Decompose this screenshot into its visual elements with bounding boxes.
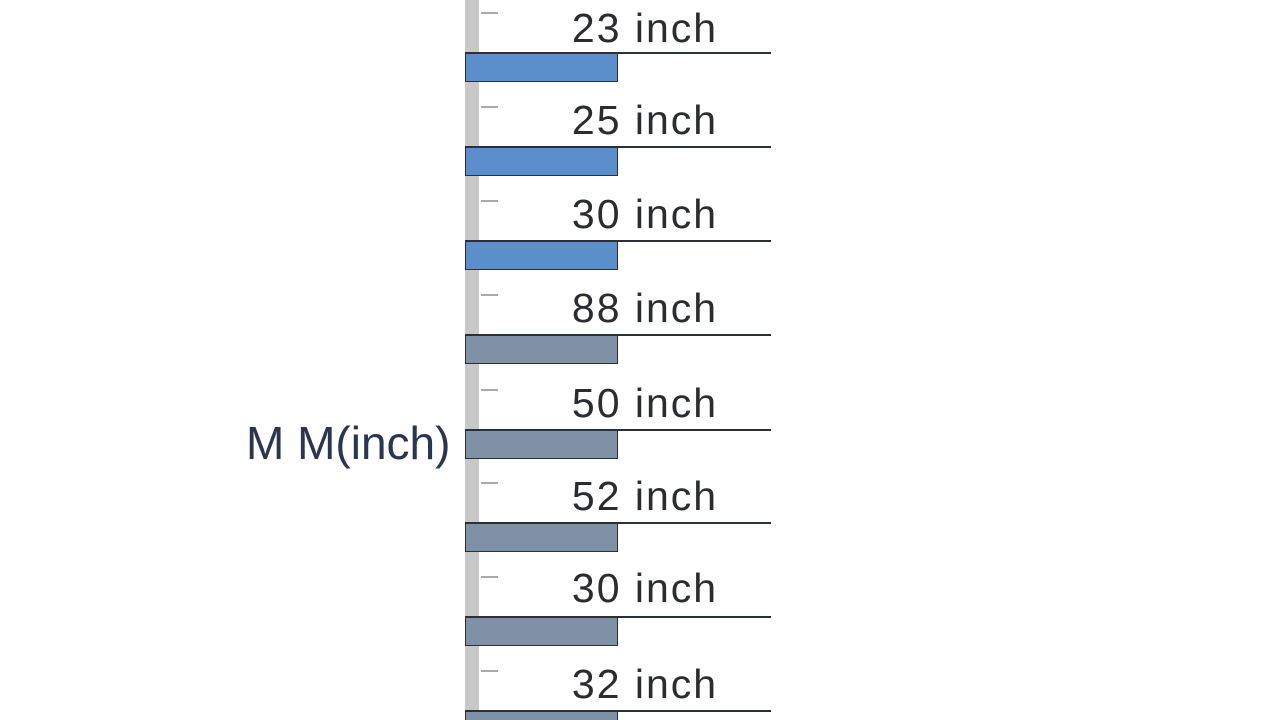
row 8: 32 inch — [572, 661, 718, 707]
row 4 — [465, 285, 771, 364]
row 5 — [465, 380, 771, 459]
row 1 — [465, 5, 771, 82]
row 7: 30 inch — [572, 565, 718, 611]
row 2 — [465, 97, 771, 176]
row 7 — [465, 565, 771, 646]
row 6 — [465, 473, 771, 552]
row 5: 50 inch — [572, 380, 718, 426]
row 6: 52 inch — [572, 473, 718, 519]
row 4: 88 inch — [572, 285, 718, 331]
row 3 — [465, 191, 771, 270]
axis bar — [465, 0, 479, 720]
row 3: 30 inch — [572, 191, 718, 237]
row 1: 23 inch — [572, 5, 718, 51]
row 2: 25 inch — [572, 97, 718, 143]
row 8 — [465, 661, 771, 720]
axis label: M M(inch) — [246, 417, 450, 469]
